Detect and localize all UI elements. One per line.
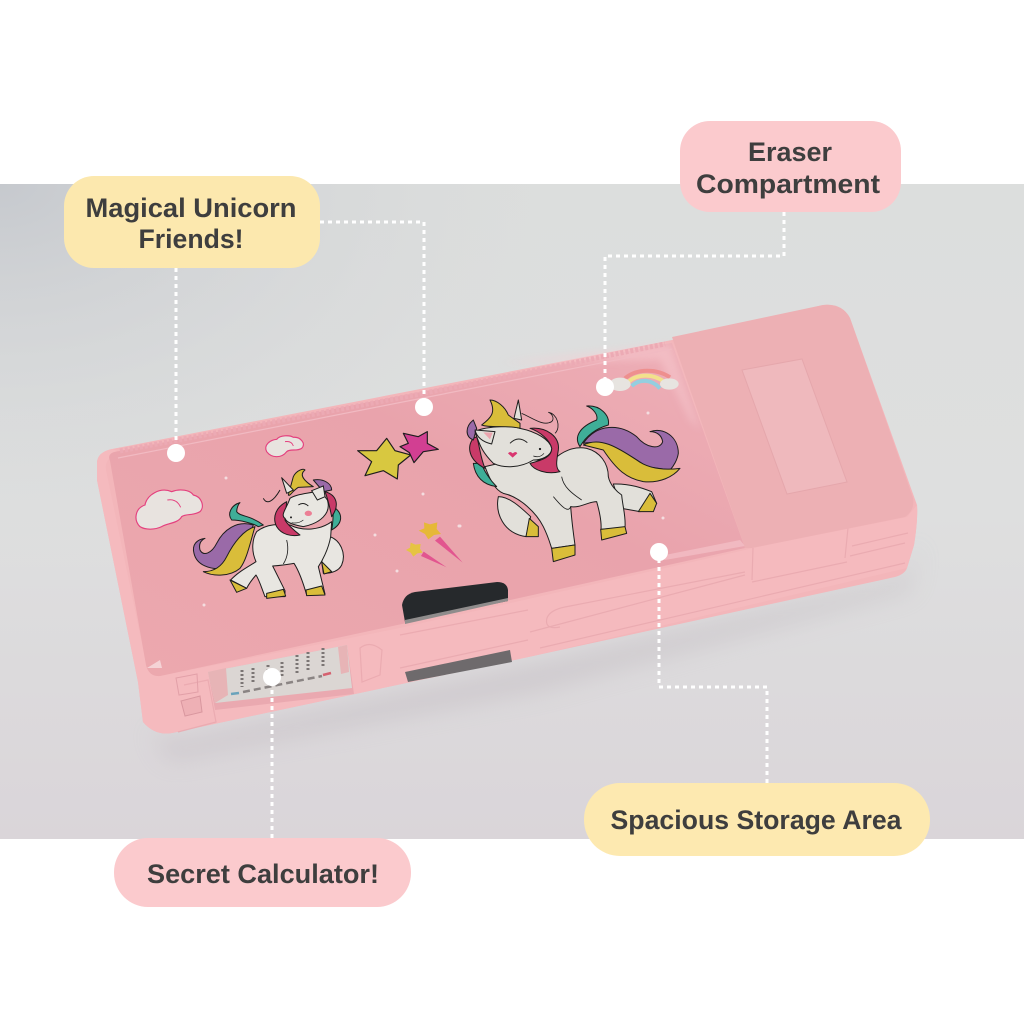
side groove lines — [178, 528, 908, 732]
lid window — [742, 359, 847, 494]
connector: Eraser Compartment — [596, 212, 784, 396]
icon: yellow star — [358, 438, 411, 479]
pink pencil box product — [64, 121, 930, 907]
icon: rainbow — [609, 371, 679, 391]
icon: shooting stars — [406, 522, 463, 567]
callout: Secret Calculator: Secret Calculator! — [147, 859, 379, 889]
textured top edge — [120, 344, 665, 451]
glossy top face — [109, 343, 745, 676]
icon: large cloud — [136, 490, 202, 529]
callout: Eraser Compartment — [680, 121, 901, 212]
connector: Spacious Storage Area — [650, 543, 767, 783]
eraser compartment lid — [672, 305, 913, 548]
right unicorn sticker — [467, 400, 680, 562]
left rim of the tray — [97, 449, 917, 734]
callout: Magical Unicorn Friends: Magical Unicorn — [86, 193, 296, 223]
icon: small cloud — [266, 436, 303, 457]
black sliding button — [402, 582, 508, 624]
icons on the left half of the lid — [136, 432, 463, 567]
callout: Magical Unicorn Friends — [64, 176, 320, 268]
callout: Magical Unicorn Friends: Friends! — [138, 224, 244, 254]
pencil box shadow — [150, 540, 920, 760]
side clip — [181, 696, 202, 716]
connector: Magical Unicorn Friends to left unicorn — [167, 268, 185, 462]
connector: Secret Calculator — [263, 668, 281, 838]
lower slot — [405, 650, 512, 682]
callout: Secret Calculator — [114, 838, 411, 907]
callout: Spacious Storage Area: Spacious Storage Area — [610, 805, 902, 835]
photo backdrop — [0, 184, 1024, 839]
left unicorn sticker — [193, 469, 343, 598]
box body — [97, 305, 917, 734]
connector: Magical Unicorn Friends to right unicorn — [320, 222, 433, 416]
calculator — [208, 645, 354, 710]
icon: pink star — [400, 432, 438, 463]
callout: Spacious Storage Area — [584, 783, 930, 856]
callout: Eraser Compartment: Eraser — [748, 137, 832, 167]
callout: Eraser Compartment: Compartment — [696, 169, 880, 199]
tiny sparkle dots — [202, 412, 664, 606]
gloss highlights — [147, 344, 745, 668]
